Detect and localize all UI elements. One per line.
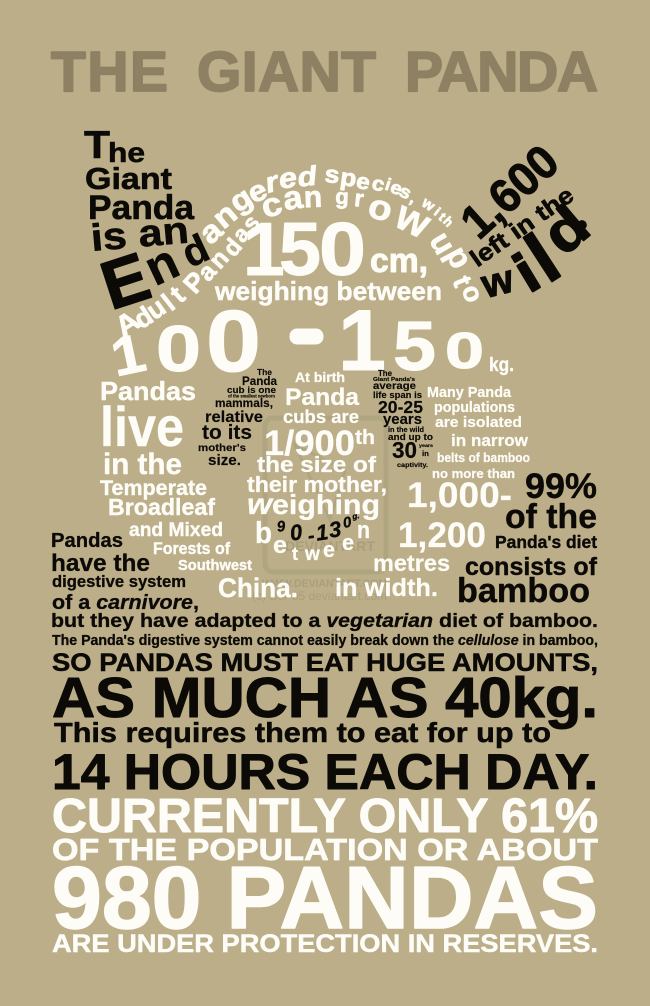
text block: 99% of the diet bamboo (457, 467, 598, 610)
text block: digestive system of a carnivore (51, 530, 199, 614)
text block: the giant panda is an endangered: is an (89, 210, 190, 260)
text block: 99% of the diet bamboo: Panda's diet (495, 532, 597, 552)
text block: isolated populations: belts of bamboo (437, 451, 530, 465)
watermark: DEVIANTART (285, 538, 375, 554)
curved text: adult pandas can grow up to: l (156, 288, 181, 317)
text block: panda cub relative size: cub is one (227, 385, 276, 396)
text block: at birth panda cubs 1/900th: Panda (285, 384, 360, 411)
text block: pandas live in the temperate broadleaf: Temperate (100, 477, 207, 500)
watermark: (c) Dsr-05 deviantart.com (252, 589, 387, 603)
curved text: adult pandas can grow up to: a (226, 221, 255, 247)
text block: isolated populations: no more than (432, 467, 515, 481)
curved text: adult pandas can grow up to: n (204, 244, 235, 274)
text block: pandas live in the temperate broadleaf: Pandas (100, 376, 196, 406)
text block: panda cub relative size: relative (205, 409, 263, 426)
text block: life span: Giant Panda's (373, 377, 415, 383)
text block: at birth panda cubs 1/900th: e (273, 532, 287, 559)
text block: black bottom statements: This requires them to eat for up to (54, 717, 551, 748)
curved text: adult pandas can grow up to: u (141, 292, 171, 326)
text block: at birth panda cubs 1/900th (247, 369, 387, 565)
text block: at birth panda cubs 1/900th: their mother, (247, 472, 387, 497)
title: GIANT (197, 40, 376, 104)
text block: 1,600 left in the wild: i (504, 242, 549, 303)
text block: black bottom statements: AS MUCH AS 40kg. (52, 666, 598, 730)
text block: white bottom statements (52, 790, 598, 958)
text block: life span: The (378, 368, 392, 378)
text block: 1,600 left in the wild: 1,600 (450, 134, 569, 248)
text block: 1,600 left in the wild: d (530, 192, 601, 267)
title (51, 40, 598, 104)
text block: 100 - 150 kg: kg. (489, 355, 514, 376)
text block: 150 cm weighing between: 5 (279, 207, 321, 291)
text block: life span: years (419, 443, 434, 448)
curved text: adult pandas can grow up to: u (423, 225, 464, 260)
text block: panda cub relative size (198, 367, 277, 469)
text block: black bottom statements: SO PANDAS MUST EAT HUGE AMOUNTS, (52, 649, 598, 677)
text block: isolated populations: are isolated (435, 414, 522, 431)
curved text: adult pandas can grow up to: d (218, 233, 248, 262)
curved text: angered species, with: i (431, 205, 443, 219)
curved text: angered species, with: c (369, 172, 387, 196)
text block: at birth panda cubs 1/900th: e (323, 537, 335, 562)
text block: life span (373, 368, 434, 469)
curved text: adult pandas can grow up to: w (388, 190, 439, 248)
text block: pandas live in the temperate broadleaf (100, 376, 298, 603)
text block: life span: 30 (392, 437, 417, 463)
text block: black bottom statements: 14 HOURS EACH DAY. (52, 744, 598, 800)
curved text: adult pandas can grow up to (109, 178, 490, 344)
text block: at birth panda cubs 1/900th: w (247, 488, 274, 521)
text block: 90-130g: 3 (327, 516, 343, 543)
text block: black bottom statements: but they have adapted to a vegetarian diet of bamboo. (51, 611, 598, 632)
curved text: adult pandas can grow up to: r (353, 185, 365, 213)
text block: the giant panda is an endangered: Panda (88, 189, 195, 227)
text block: pandas live in the temperate broadleaf: live (100, 395, 184, 458)
text block: 150 cm weighing between: cm, (370, 242, 428, 280)
text block: 99% of the diet bamboo: of the (505, 498, 597, 536)
text block: 90-130g: 0 (342, 514, 353, 532)
text block: the giant panda is an endangered (84, 124, 216, 325)
curved text: angered species, with: e (387, 177, 405, 200)
text block: life span: 20-25 (378, 397, 423, 417)
text block: at birth panda cubs 1/900th: the size of (257, 452, 377, 477)
text block: pandas live in the temperate broadleaf: Forests of (153, 540, 230, 558)
curved text: angered species, with: , (407, 190, 419, 207)
curved text: adult pandas can grow up to: s (237, 210, 265, 236)
curved text: adult pandas can grow up to: o (364, 186, 397, 229)
text block: 90-130g: 9 (276, 518, 287, 536)
text block: 100 - 150 kg: 1 (106, 323, 151, 389)
text block: at birth panda cubs 1/900th: 1/900 (264, 424, 355, 463)
text block: panda cub relative size: mother's (198, 442, 246, 454)
text block: pandas live in the temperate broadleaf: and Mixed (129, 520, 223, 541)
text block: digestive system of a carnivore: Pandas (51, 530, 123, 552)
curved text: angered species, with: w (418, 194, 438, 215)
curved text: angered species, with: h (440, 214, 457, 230)
text block: at birth panda cubs 1/900th: cubs are (283, 406, 359, 427)
text block: 90-130g: - (306, 525, 316, 548)
text block: isolated populations: Many Panda (427, 385, 512, 401)
text block: 100 - 150 kg (106, 293, 514, 390)
text block: 100 - 150 kg: 1 (338, 293, 386, 389)
curved text: angered species, with: g (223, 179, 258, 219)
curved text: adult pandas can grow up to: a (192, 257, 223, 287)
text block: pandas live in the temperate broadleaf: Broadleaf (108, 494, 215, 520)
text block: isolated populations: in width. (335, 574, 438, 602)
text block: life span: in (422, 451, 429, 458)
text block: 99% of the diet bamboo: bamboo (457, 572, 590, 610)
curved text: adult pandas can grow up to: P (177, 266, 212, 299)
curved text: angered species, with: s (396, 181, 414, 204)
text block: isolated populations: in narrow (451, 431, 529, 450)
text block: at birth panda cubs 1/900th: n (357, 517, 370, 544)
curved text: adult pandas can grow up to: A (109, 304, 146, 344)
text block: panda cub relative size: The (257, 367, 272, 377)
text block: white bottom statements: OF THE POPULATION OR ABOUT (52, 832, 598, 867)
text block: pandas live in the temperate broadleaf: China. (218, 573, 298, 603)
text block: 100 - 150 kg: 0 (156, 312, 201, 385)
text block: isolated populations (335, 385, 530, 602)
curved text: adult pandas can grow up to: c (257, 185, 286, 226)
curved text: angered species, with: p (339, 164, 358, 193)
curved text: adult pandas can grow up to: a (281, 178, 306, 218)
text block: digestive system of a carnivore: of a carnivore , (52, 592, 199, 614)
text block: black bottom statements (51, 611, 598, 800)
curved text: adult pandas can grow up to: g (335, 184, 349, 209)
text block: panda cub relative size: size. (208, 452, 241, 469)
text block: 90-130g (276, 511, 360, 548)
text block: isolated populations: metres (373, 550, 450, 576)
curved text: angered species, with: r (261, 166, 284, 199)
text block: life span: in the wild (388, 425, 424, 434)
text block: life span: and up to (388, 432, 433, 443)
text block: 99% of the diet bamboo: consists of (465, 553, 598, 581)
curved text: angered species, with: n (206, 196, 244, 235)
text block: the giant panda is an endangered: he (108, 137, 145, 168)
text block: digestive system of a carnivore: digestive system (52, 572, 186, 591)
text block: panda cub relative size: Panda (242, 374, 277, 388)
text block: 90-130g: g. (351, 511, 360, 521)
watermark (252, 418, 387, 603)
text block: white bottom statements: CURRENTLY ONLY 61% (52, 790, 598, 843)
curved text: angered species, with: t (436, 210, 450, 224)
curved text: adult pandas can grow up to: d (128, 301, 158, 335)
title: PANDA (405, 40, 598, 104)
text block: at birth panda cubs 1/900th: w (304, 544, 320, 565)
text block: at birth panda cubs 1/900th: e (342, 530, 354, 555)
text block: 100 - 150 kg: 5 (393, 307, 436, 385)
text block: black bottom statements: The Panda's digestive system cannot easily break down the cellulose in bamboo, (52, 633, 598, 649)
text block: isolated populations: 1,200 (398, 516, 486, 555)
curved text: angered species, with: s (324, 161, 341, 189)
text block: 1,600 left in the wild: w (476, 257, 519, 307)
text block: 99% of the diet bamboo: 99% (525, 467, 597, 506)
text block: 90-130g: 1 (314, 519, 330, 546)
text block: at birth panda cubs 1/900th: th (355, 427, 375, 449)
text block: panda cub relative size: to its (202, 422, 252, 444)
curved text: adult pandas can grow up to: p (439, 240, 480, 274)
text block: 1,600 left in the wild: left in the (465, 182, 579, 273)
text block: isolated populations: populations (434, 400, 515, 416)
text block: life span: life span is (373, 390, 422, 401)
curved text: angered species, with: e (276, 162, 299, 195)
text block: white bottom statements: 980 PANDAS (52, 848, 598, 947)
text block: the giant panda is an endangered: d (175, 226, 216, 276)
text block: at birth panda cubs 1/900th: t (292, 544, 298, 564)
text block: at birth panda cubs 1/900th: eighing (272, 489, 380, 520)
text block: 100 - 150 kg: 0 (206, 293, 261, 390)
text block: panda cub relative size: mammals, (215, 396, 273, 410)
text block: at birth panda cubs 1/900th: b (255, 515, 272, 550)
curved text: adult pandas can grow up to: t (447, 271, 478, 291)
curved text: adult pandas can grow up to: o (456, 281, 490, 306)
curved text: angered species, with: e (354, 168, 372, 195)
curved text: angered species, with (192, 161, 457, 251)
curved text: angered species, with: i (383, 175, 393, 194)
text block: the giant panda is an endangered: n (136, 233, 187, 297)
text block: the giant panda is an endangered: T (84, 124, 110, 167)
text block: isolated populations: 1,000- (407, 476, 512, 515)
text block: panda cub relative size: of the smallest newborn (228, 394, 275, 398)
curved text: adult pandas can grow up to: n (303, 181, 323, 214)
text block: white bottom statements: ARE UNDER PROTECTION IN RESERVES. (52, 930, 598, 958)
text block: life span: captivity. (397, 462, 428, 469)
curved text: angered species, with: e (243, 173, 272, 210)
text block: digestive system of a carnivore: have the (51, 550, 150, 577)
text block: pandas live in the temperate broadleaf: Southwest (178, 558, 252, 574)
text block: 150 cm weighing between: 1 (243, 207, 285, 291)
text block: 90-130g: 0 (288, 519, 305, 546)
text block: 100 - 150 kg: 0 (445, 322, 484, 379)
curved text: angered species, with: a (192, 212, 230, 251)
text block: 150 cm weighing between: 0 (319, 207, 366, 291)
text block: at birth panda cubs 1/900th: At birth (295, 369, 345, 385)
text block: pandas live in the temperate broadleaf: in the (103, 448, 182, 481)
title: THE (51, 40, 168, 104)
text block: 1,600 left in the wild (450, 134, 601, 307)
curved text: adult pandas can grow up to: t (164, 280, 191, 309)
text block: life span: years (383, 412, 422, 428)
text block: the giant panda is an endangered: E (92, 238, 159, 325)
text block: 1,600 left in the wild: l (513, 220, 573, 298)
text block: the giant panda is an endangered: Giant (85, 161, 172, 196)
watermark: WWW.DEVIANTART.COM (262, 578, 387, 590)
text block: 150 cm weighing between (214, 207, 442, 306)
curved text: angered species, with: d (296, 161, 320, 193)
text block: 150 cm weighing between: weighing between (214, 276, 442, 306)
text block: life span: average (373, 380, 416, 392)
